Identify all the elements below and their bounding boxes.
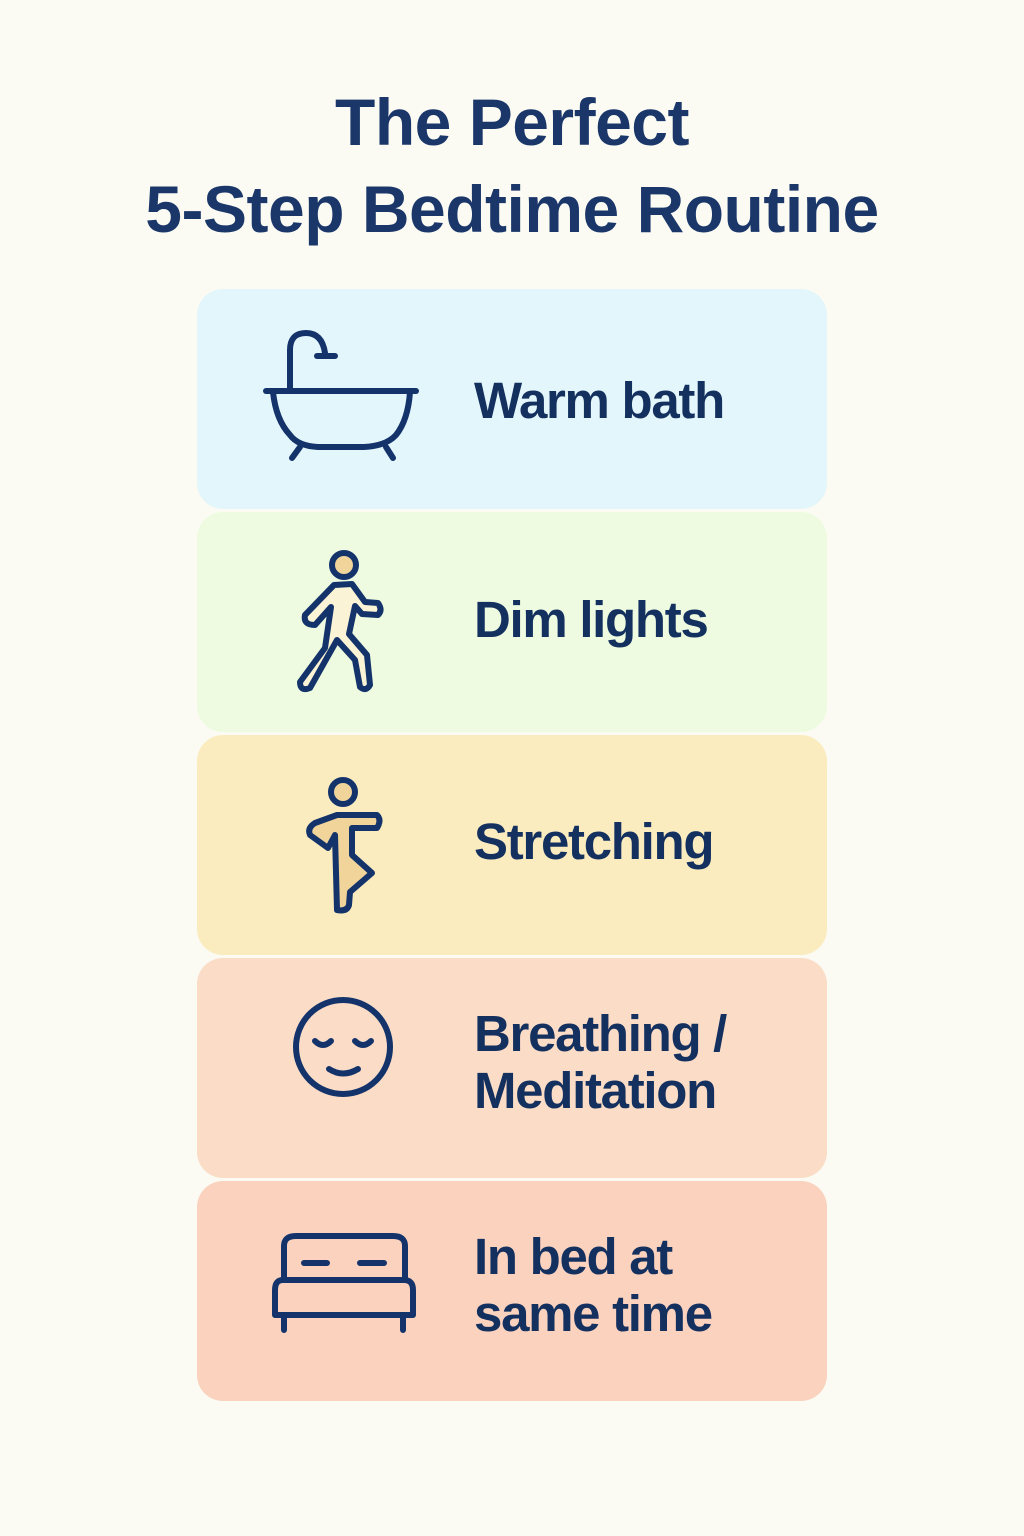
text: stretching: Stretching	[474, 813, 713, 870]
panel: in bed	[197, 1181, 827, 1401]
panel: breathing	[197, 958, 827, 1178]
icon: stretching person	[306, 777, 383, 914]
icon: calm face	[293, 997, 393, 1097]
icon: walking person	[297, 550, 384, 692]
title: The Perfect	[335, 85, 689, 159]
panel: stretching	[197, 735, 827, 955]
title	[145, 85, 879, 246]
text: warm bath: Warm bath	[474, 372, 724, 429]
text: breathing / meditation: Breathing /	[474, 1005, 726, 1062]
icon: bed	[272, 1233, 416, 1333]
panel: dim lights	[197, 512, 827, 732]
text: breathing / meditation: Meditation	[474, 1062, 716, 1119]
text: breathing / meditation	[474, 1005, 727, 1119]
text: dim lights: Dim lights	[474, 591, 708, 648]
text: in bed at same time: same time	[474, 1285, 712, 1342]
icon: bathtub	[263, 330, 419, 461]
text: in bed at same time	[474, 1228, 712, 1342]
text: in bed at same time: In bed at	[474, 1228, 672, 1285]
title: 5-Step Bedtime Routine	[145, 172, 879, 246]
panel: warm bath	[197, 289, 827, 509]
